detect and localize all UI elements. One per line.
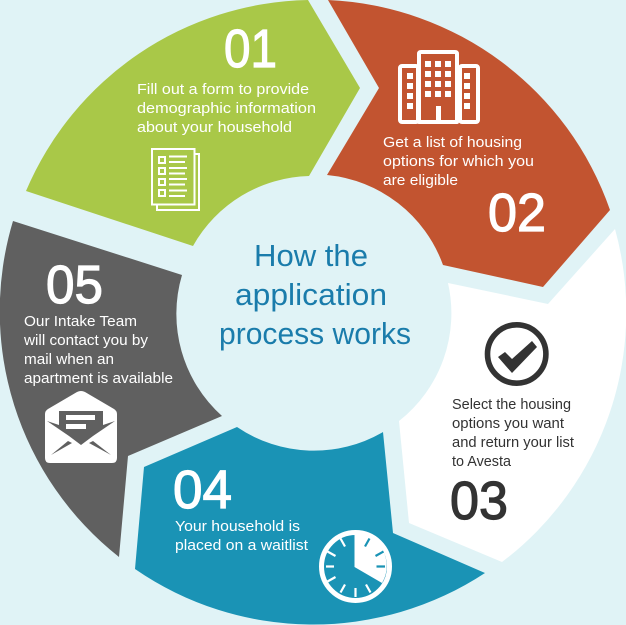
text: step 01 description: Fill out a form to provide xyxy=(137,82,309,98)
text: step 01 description xyxy=(137,82,316,136)
text: step 02 description: Get a list of housing xyxy=(383,135,522,151)
text: step 04 description xyxy=(175,519,308,554)
text: step 05 description: will contact you by xyxy=(23,333,149,349)
panel: step 04 xyxy=(135,427,485,625)
number 04: 04 xyxy=(173,460,232,520)
icon: form document xyxy=(152,149,199,210)
panel: step 03 xyxy=(399,229,626,562)
text: step 05 description xyxy=(23,314,173,387)
icon: apartment building xyxy=(400,52,478,122)
text: step 02 description: are eligible xyxy=(383,173,458,189)
text: step 03 description: to Avesta xyxy=(452,454,512,470)
panel: step 01 xyxy=(26,0,360,246)
icon: clock xyxy=(322,532,390,600)
number 01: 01 xyxy=(224,19,277,79)
number 05: 05 xyxy=(46,255,103,315)
title xyxy=(219,238,411,351)
title: How the xyxy=(254,238,368,273)
icon: check mark circle xyxy=(488,325,546,383)
text: step 05 description: mail when an xyxy=(24,352,114,368)
text: step 01 description: demographic information xyxy=(137,101,316,117)
panel: step 05 xyxy=(0,221,222,557)
number 02: 02 xyxy=(488,183,546,243)
title: process works xyxy=(219,316,411,351)
icon: open envelope xyxy=(45,391,117,463)
text: step 03 description: Select the housing xyxy=(452,397,571,413)
number 03: 03 xyxy=(450,471,508,531)
text: step 03 description xyxy=(452,397,574,470)
text: step 04 description: placed on a waitlist xyxy=(175,538,308,554)
text: step 01 description: about your household xyxy=(137,120,292,136)
text: step 05 description: apartment is available xyxy=(24,371,173,387)
text: step 03 description: options you want xyxy=(452,416,564,432)
text: step 02 description: options for which you xyxy=(383,154,534,170)
text: step 02 description xyxy=(383,135,534,189)
panel: step 02 xyxy=(327,0,610,287)
text: step 05 description: Our Intake Team xyxy=(24,314,137,330)
text: step 04 description: Your household is xyxy=(175,519,300,535)
text: step 03 description: and return your list xyxy=(452,435,574,451)
title: application xyxy=(235,277,387,312)
